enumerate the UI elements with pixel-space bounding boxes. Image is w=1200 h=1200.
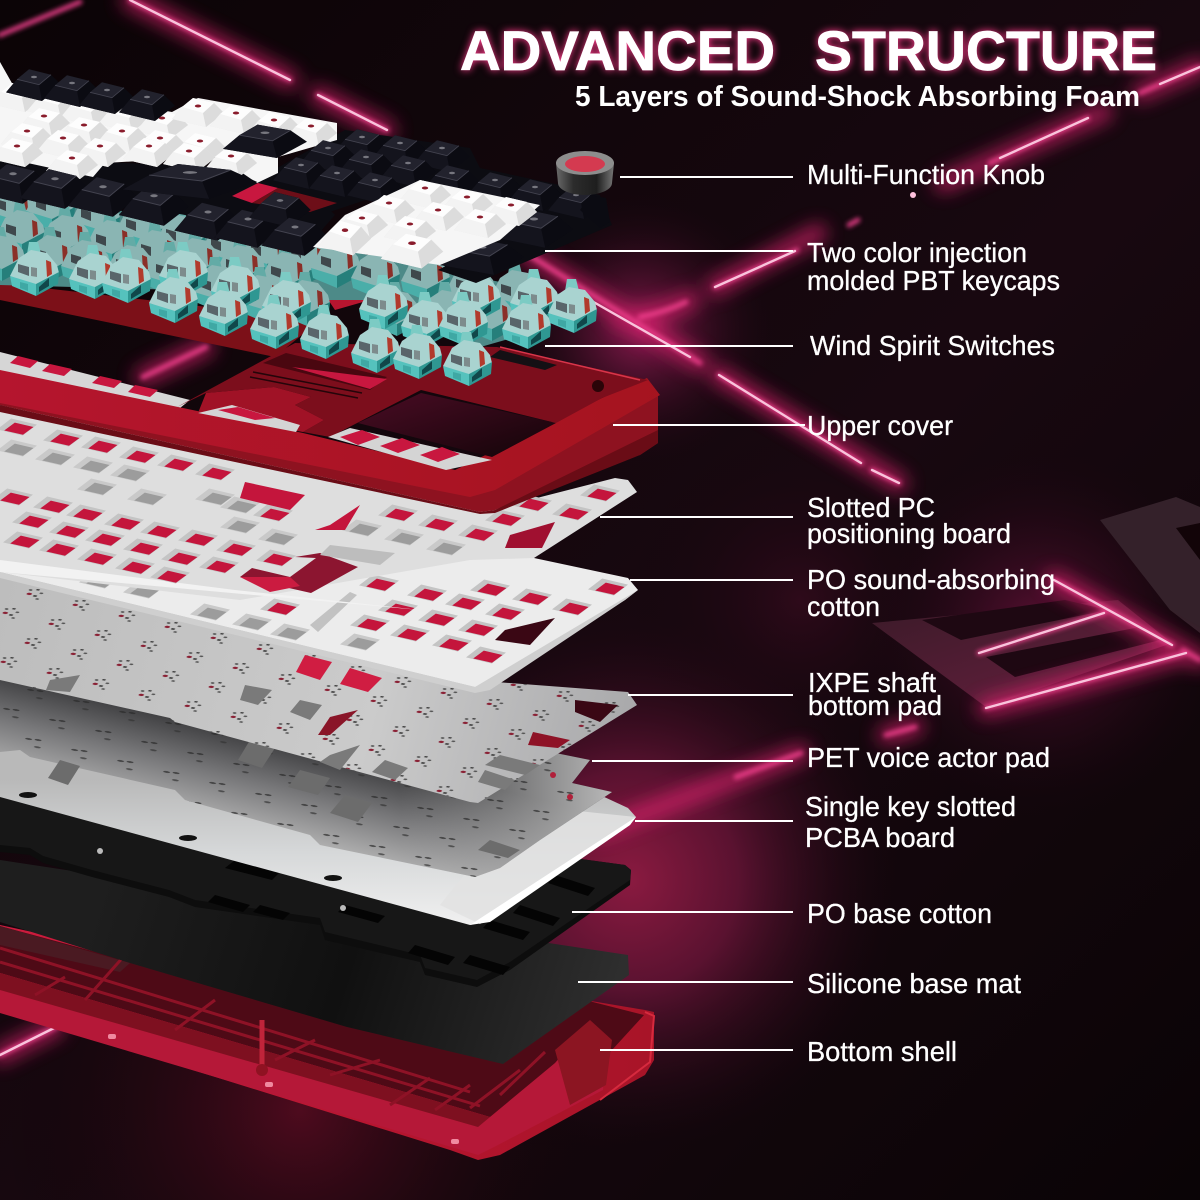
icon: multi-function knob: [556, 151, 614, 195]
layer: PET voice actor pad: [0, 640, 612, 877]
layer: single key slotted PCBA board: [0, 700, 636, 925]
callout: slotted PC positioning board: [600, 492, 1011, 549]
callout: bottom shell: Bottom shell: [807, 1036, 957, 1067]
dark keycaps: [0, 69, 610, 275]
callout: single key slotted PCBA board: [635, 791, 1016, 853]
callout: PO sound-absorbing cotton: cotton: [807, 591, 880, 622]
switch backing mass: [0, 190, 590, 350]
layer: PO base cotton: [0, 780, 631, 987]
title: STRUCTURE: [815, 19, 1157, 82]
callout: PBT keycaps: Two color injection: [807, 237, 1027, 268]
callout: PBT keycaps: molded PBT keycaps: [807, 265, 1060, 296]
callout: IXPE shaft bottom pad: IXPE shaft: [808, 667, 936, 698]
callout: IXPE shaft bottom pad: [628, 667, 942, 721]
callout: multi-function knob: Multi-Function Knob: [807, 159, 1045, 190]
callout: IXPE shaft bottom pad: bottom pad: [808, 690, 942, 721]
white numpad keys: [313, 180, 540, 268]
layer: bottom shell: [0, 925, 654, 1160]
callout: PO base cotton: PO base cotton: [807, 898, 992, 929]
callout: PO sound-absorbing cotton: PO sound-absorbing: [807, 564, 1055, 595]
callout: PO sound-absorbing cotton: [630, 564, 1055, 622]
front switch rows: [10, 242, 597, 386]
subtitle: 5 Layers of Sound-Shock Absorbing Foam: [575, 81, 1140, 113]
layer: slotted PC positioning board: [0, 405, 637, 610]
white keycap field: [0, 62, 337, 183]
callout: single key slotted PCBA board: PCBA board: [805, 822, 955, 853]
layer: PO sound-absorbing cotton: [0, 470, 638, 693]
red switch plate: [0, 280, 370, 357]
callout: single key slotted PCBA board: Single key slotted: [805, 791, 1016, 822]
callout: slotted PC positioning board: Slotted PC: [807, 492, 935, 523]
callout: PBT keycaps: [545, 237, 1060, 296]
layer: silicone base mat: [0, 860, 629, 1064]
callout: upper cover: Upper cover: [807, 410, 953, 441]
back switch rows: [0, 177, 540, 341]
switches: [0, 177, 597, 386]
title: ADVANCED: [460, 19, 775, 82]
callout: wind spirit switches: Wind Spirit Switches: [810, 330, 1055, 361]
title: [460, 19, 1157, 82]
callout: silicone base mat: Silicone base mat: [807, 968, 1021, 999]
callout: PET voice actor pad: PET voice actor pad: [807, 742, 1050, 773]
layer: upper cover: [0, 343, 660, 514]
keycaps: [0, 62, 612, 283]
background dark 3D shape: [872, 497, 1200, 707]
callout: slotted PC positioning board: positioning board: [807, 518, 1011, 549]
dark keycap backing: [0, 130, 612, 283]
layer: IXPE shaft bottom pad: [0, 560, 637, 803]
